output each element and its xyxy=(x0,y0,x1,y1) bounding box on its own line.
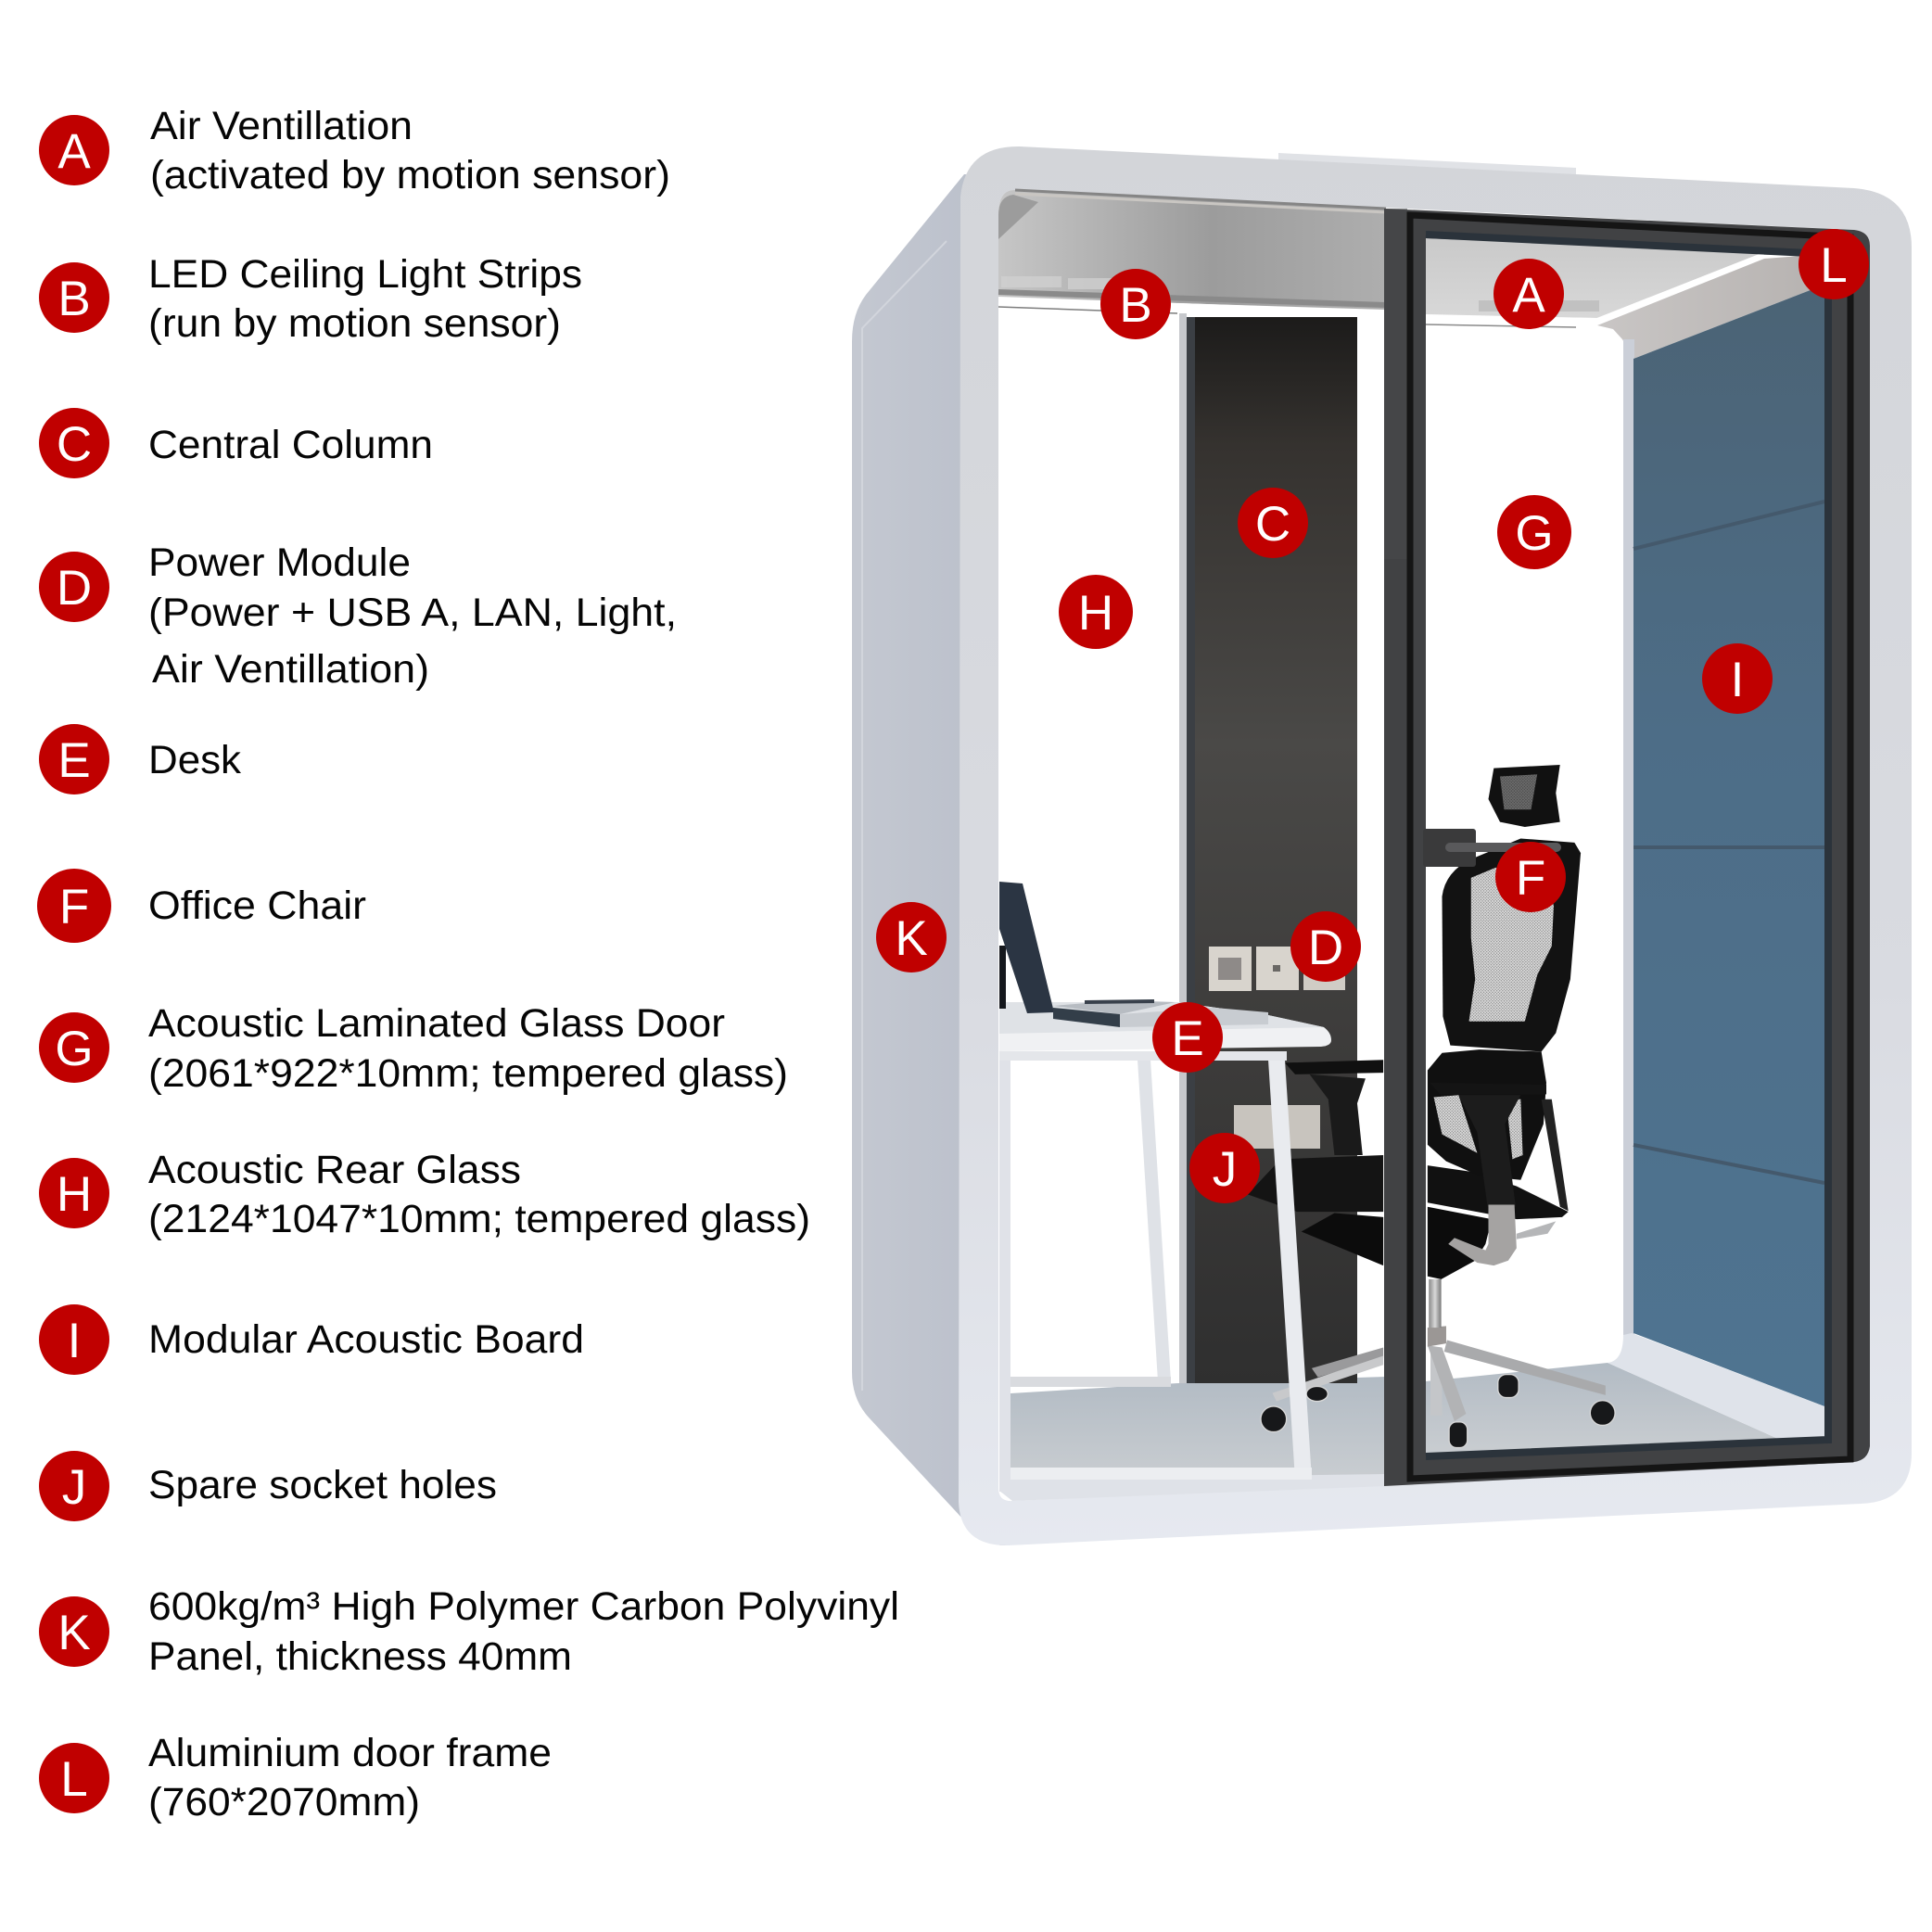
legend item A: Air Ventillation xyxy=(150,104,413,148)
ceiling panel xyxy=(998,190,1386,311)
modular acoustic board xyxy=(1633,285,1824,1406)
callout L: L xyxy=(1820,238,1848,293)
left armrest xyxy=(1285,1060,1383,1155)
desk xyxy=(999,882,1331,1492)
callout A: A xyxy=(1512,268,1545,323)
legend item L xyxy=(39,1731,552,1824)
legend item L: (760*2070mm) xyxy=(148,1780,420,1824)
legend item D: Air Ventillation) xyxy=(152,647,429,692)
legend item F: F xyxy=(59,880,89,934)
pod opening xyxy=(998,190,1870,1501)
legend item D: D xyxy=(57,561,92,616)
legend item K: Panel, thickness 40mm xyxy=(148,1634,572,1679)
legend item F xyxy=(37,869,366,943)
legend list xyxy=(37,104,899,1824)
ceiling panel seen through door xyxy=(1426,238,1801,318)
LED light strips xyxy=(998,255,1764,327)
floor xyxy=(999,1333,1824,1501)
legend item J: Spare socket holes xyxy=(148,1463,497,1507)
chair back xyxy=(1443,838,1581,1051)
roof vent lip xyxy=(1278,153,1576,182)
right wall upper wedge xyxy=(1597,254,1824,359)
legend item I xyxy=(39,1304,584,1375)
phone booth pod illustration xyxy=(852,146,1912,1545)
pod front frame xyxy=(959,146,1912,1545)
legend item C: Central Column xyxy=(148,423,433,467)
callout B xyxy=(1100,269,1171,339)
legend item E: E xyxy=(57,733,91,788)
legend item K xyxy=(39,1584,899,1679)
legend item C: C xyxy=(57,417,92,472)
callout J xyxy=(1189,1133,1260,1203)
legend item H: (2124*1047*10mm; tempered glass) xyxy=(148,1197,810,1241)
legend item C xyxy=(39,408,433,478)
ventilation grille right xyxy=(1479,300,1599,311)
power module xyxy=(1209,947,1345,991)
wall edge xyxy=(1623,339,1634,1335)
legend item D xyxy=(39,540,677,692)
callout E xyxy=(1152,1002,1223,1073)
legend item L: L xyxy=(60,1752,88,1807)
legend item D: (Power + USB A, LAN, Light, xyxy=(148,591,677,635)
door handle xyxy=(1423,829,1561,867)
callout I: I xyxy=(1731,653,1744,707)
callout H: H xyxy=(1078,586,1113,641)
legend item I: Modular Acoustic Board xyxy=(148,1317,584,1362)
door frame xyxy=(1384,209,1870,1486)
callout I xyxy=(1702,643,1773,714)
legend item E xyxy=(39,724,242,794)
chair lower back xyxy=(1428,1049,1569,1211)
legend item L: Aluminium door frame xyxy=(148,1731,552,1775)
pod side panel xyxy=(852,174,1020,1545)
legend item J xyxy=(39,1451,497,1521)
laptop xyxy=(999,882,1054,1013)
callout K xyxy=(876,902,947,972)
legend item B: LED Ceiling Light Strips xyxy=(148,252,582,297)
callout C xyxy=(1238,488,1308,558)
callout A xyxy=(1493,259,1564,329)
callout F xyxy=(1495,842,1566,912)
chair base xyxy=(1272,1279,1606,1421)
legend item A xyxy=(39,104,670,197)
legend item K: 600kg/m³ High Polymer Carbon Polyvinyl xyxy=(148,1584,899,1629)
legend item J: J xyxy=(62,1460,86,1515)
ventilation grille left xyxy=(1001,276,1112,289)
callout C: C xyxy=(1255,497,1290,552)
callout D: D xyxy=(1308,921,1343,975)
legend item H xyxy=(39,1148,810,1241)
legend item G xyxy=(39,1001,788,1096)
desk rear leg and rung xyxy=(1010,1060,1171,1387)
callout L xyxy=(1799,229,1869,299)
callout J: J xyxy=(1213,1142,1237,1197)
books on desk xyxy=(1053,1000,1268,1027)
callout B: B xyxy=(1119,278,1152,333)
callout H xyxy=(1059,575,1133,649)
legend item G: (2061*922*10mm; tempered glass) xyxy=(148,1051,788,1096)
legend item H: Acoustic Rear Glass xyxy=(148,1148,521,1192)
right armrest xyxy=(1430,1083,1546,1265)
spare socket holes xyxy=(1234,1105,1320,1149)
legend item F: Office Chair xyxy=(148,883,366,928)
callout F: F xyxy=(1516,851,1545,906)
legend item D: Power Module xyxy=(148,540,411,585)
legend item B: (run by motion sensor) xyxy=(148,301,561,346)
legend item H: H xyxy=(57,1167,92,1222)
legend item E: Desk xyxy=(148,738,242,782)
chair seat xyxy=(1248,1155,1569,1279)
chair headrest xyxy=(1489,765,1560,827)
callout G: G xyxy=(1515,506,1554,561)
legend item K: K xyxy=(57,1606,91,1660)
legend item A: A xyxy=(57,124,91,179)
callout K: K xyxy=(895,911,928,966)
legend item I: I xyxy=(68,1314,81,1368)
central column xyxy=(1179,313,1357,1383)
callout G xyxy=(1497,495,1571,569)
chair casters xyxy=(1261,1375,1615,1448)
callout D xyxy=(1290,911,1361,982)
office chair xyxy=(1248,765,1615,1448)
callout E: E xyxy=(1171,1011,1204,1066)
legend item B xyxy=(39,252,582,346)
legend item B: B xyxy=(57,272,91,326)
legend item A: (activated by motion sensor) xyxy=(150,153,670,197)
legend item G: G xyxy=(55,1022,94,1076)
legend item G: Acoustic Laminated Glass Door xyxy=(148,1001,725,1046)
